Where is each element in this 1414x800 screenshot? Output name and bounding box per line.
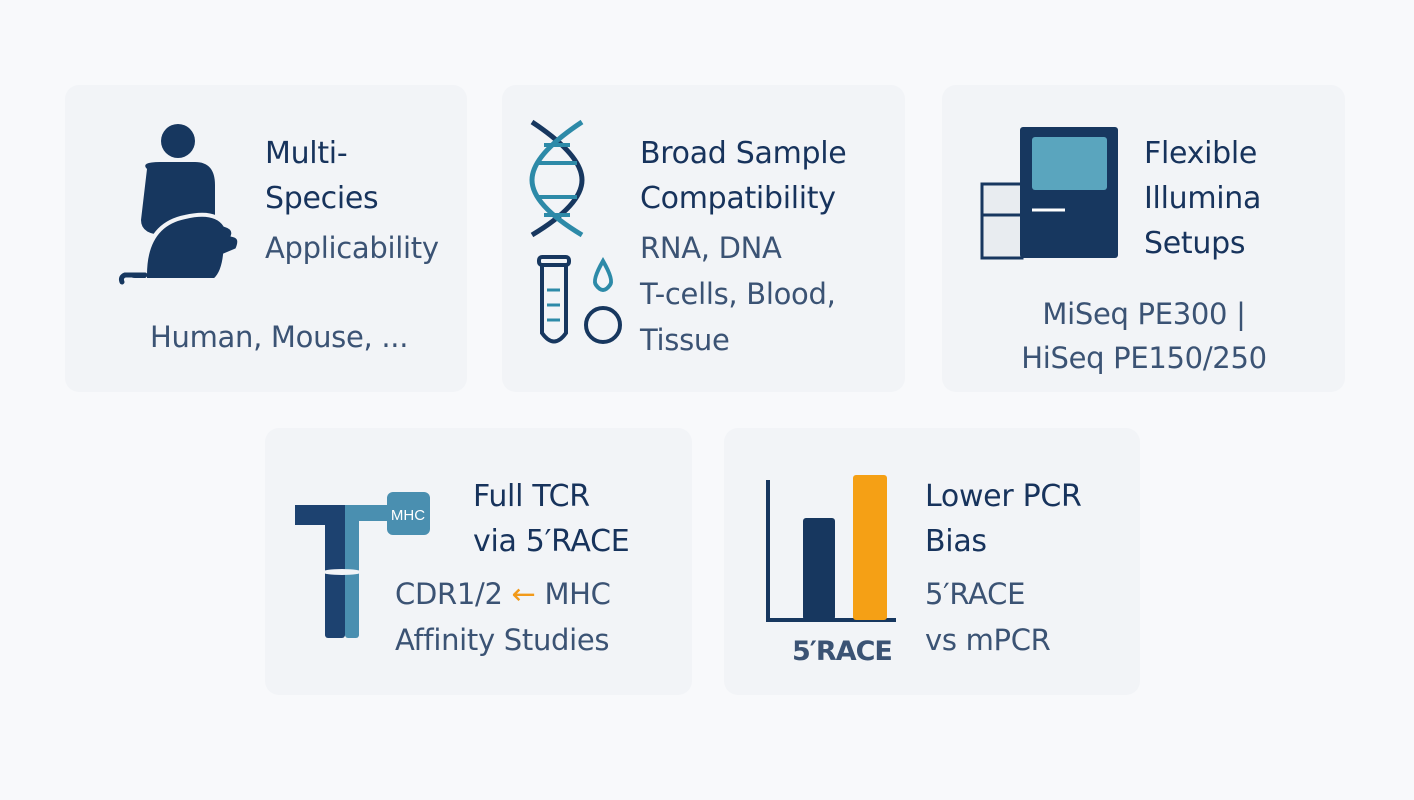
heading: Multi-: [265, 136, 347, 171]
subtitle: [925, 577, 1051, 657]
icon: TCR and MHC: [295, 492, 430, 638]
heading: Lower PCR: [925, 479, 1082, 514]
icon: TCR and MHC: MHC: [391, 507, 425, 524]
icon: human and mouse: [118, 124, 238, 284]
panel: sample compatibility: [502, 85, 905, 392]
subtitle: T-cells, Blood,: [640, 277, 836, 311]
subtitle: vs mPCR: [925, 623, 1051, 657]
heading: Setups: [1144, 226, 1245, 261]
text: HiSeq PE150/250: [1021, 341, 1267, 375]
panel: multi-species: [65, 85, 467, 392]
heading: Compatibility: [640, 181, 836, 216]
text: Human, Mouse, ...: [150, 320, 408, 354]
subtitle: Applicability: [265, 231, 439, 265]
heading: via 5′RACE: [473, 524, 629, 559]
heading: Illumina: [1144, 181, 1261, 216]
text: [1021, 297, 1267, 375]
subtitle: 5′RACE: [925, 577, 1025, 611]
subtitle: RNA, DNA: [640, 231, 782, 265]
heading: [640, 136, 846, 216]
subtitle: [395, 577, 611, 657]
heading: Flexible: [1144, 136, 1257, 171]
heading: [473, 479, 629, 559]
subtitle: Tissue: [640, 323, 730, 357]
chart: bars: [766, 475, 896, 667]
subtitle: CDR1/2 ← MHC: [395, 577, 611, 611]
icon: sequencer: [980, 127, 1118, 260]
heading: Full TCR: [473, 479, 590, 514]
subtitle: Affinity Studies: [395, 623, 609, 657]
text: MiSeq PE300 |: [1042, 297, 1246, 331]
heading: Bias: [925, 524, 987, 559]
subtitle: [640, 231, 836, 357]
heading: Species: [265, 181, 378, 216]
heading: [925, 479, 1082, 559]
chart: bars: 5′RACE: [792, 636, 892, 667]
heading: [265, 136, 378, 216]
panel: illumina: [942, 85, 1345, 392]
heading: Broad Sample: [640, 136, 846, 171]
panel: full TCR: [265, 428, 692, 695]
panel: PCR bias: [724, 428, 1140, 695]
icon: DNA, tube, drop: [530, 120, 622, 344]
heading: [1144, 136, 1261, 261]
